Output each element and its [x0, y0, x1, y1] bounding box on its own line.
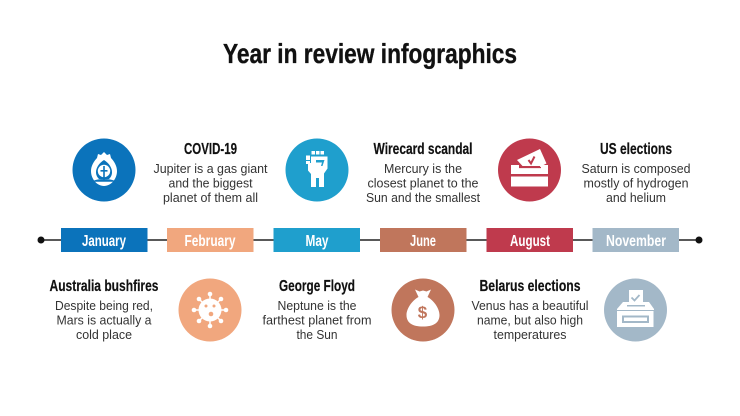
text: COVID-19: and the biggest — [168, 176, 253, 190]
text: Belarus elections: name, but also high — [477, 312, 583, 328]
text: COVID-19: COVID-19 — [184, 141, 237, 158]
month: August — [486, 228, 573, 252]
text: Belarus elections: Belarus elections — [480, 278, 581, 295]
icon: ballot box outline — [604, 278, 667, 342]
month: November — [592, 228, 679, 252]
text: Australia bushfires: Australia bushfires — [50, 278, 159, 295]
text: George Floyd — [262, 278, 372, 342]
text: George Floyd: Neptune is the — [278, 298, 356, 313]
text: US elections: Saturn is composed — [582, 161, 690, 176]
text: Belarus elections — [472, 278, 589, 342]
month: May — [274, 228, 360, 252]
month: May: May — [306, 233, 329, 250]
text: US elections: mostly of hydrogen — [584, 176, 688, 190]
month: November: November — [606, 233, 666, 250]
icon: tree in flame — [72, 138, 136, 202]
text: Wirecard scandal — [366, 141, 480, 205]
month: February — [167, 228, 254, 252]
text: Belarus elections: temperatures — [494, 327, 567, 342]
icon: virus — [178, 278, 242, 342]
text: COVID-19: Jupiter is a gas giant — [154, 161, 268, 176]
text: Australia bushfires: Despite being red, — [55, 298, 153, 313]
text: Australia bushfires: cold place — [76, 327, 132, 342]
icon: money bag — [392, 278, 454, 342]
text: COVID-19 — [154, 141, 268, 205]
text: Wirecard scandal: Mercury is the — [384, 161, 462, 176]
month: February: February — [184, 233, 236, 250]
month: January — [61, 228, 148, 252]
month: June: June — [410, 233, 436, 250]
text: George Floyd: George Floyd — [279, 278, 355, 295]
month: August: August — [510, 233, 550, 250]
text: Belarus elections: Venus has a beautiful — [472, 298, 589, 313]
icon: ballot box with check — [498, 138, 561, 202]
timeline — [38, 228, 702, 252]
icon: raised fist — [286, 138, 348, 202]
text: US elections: US elections — [600, 141, 672, 158]
text: George Floyd: farthest planet from — [262, 312, 372, 328]
text: Australia bushfires: Mars is actually a — [56, 312, 152, 328]
text: George Floyd: the Sun — [296, 327, 338, 342]
text: Wirecard scandal: Wirecard scandal — [374, 141, 472, 158]
text: US elections: and helium — [606, 190, 666, 205]
text: Wirecard scandal: closest planet to the — [368, 176, 478, 190]
icon: money bag: $ — [418, 303, 428, 322]
month: June — [380, 228, 466, 252]
month: January: January — [82, 233, 126, 250]
title: Year in review infographics — [223, 38, 517, 69]
text: Wirecard scandal: Sun and the smallest — [366, 190, 480, 205]
text: Australia bushfires — [50, 278, 159, 342]
text: US elections — [582, 141, 690, 205]
text: COVID-19: planet of them all — [163, 190, 258, 205]
